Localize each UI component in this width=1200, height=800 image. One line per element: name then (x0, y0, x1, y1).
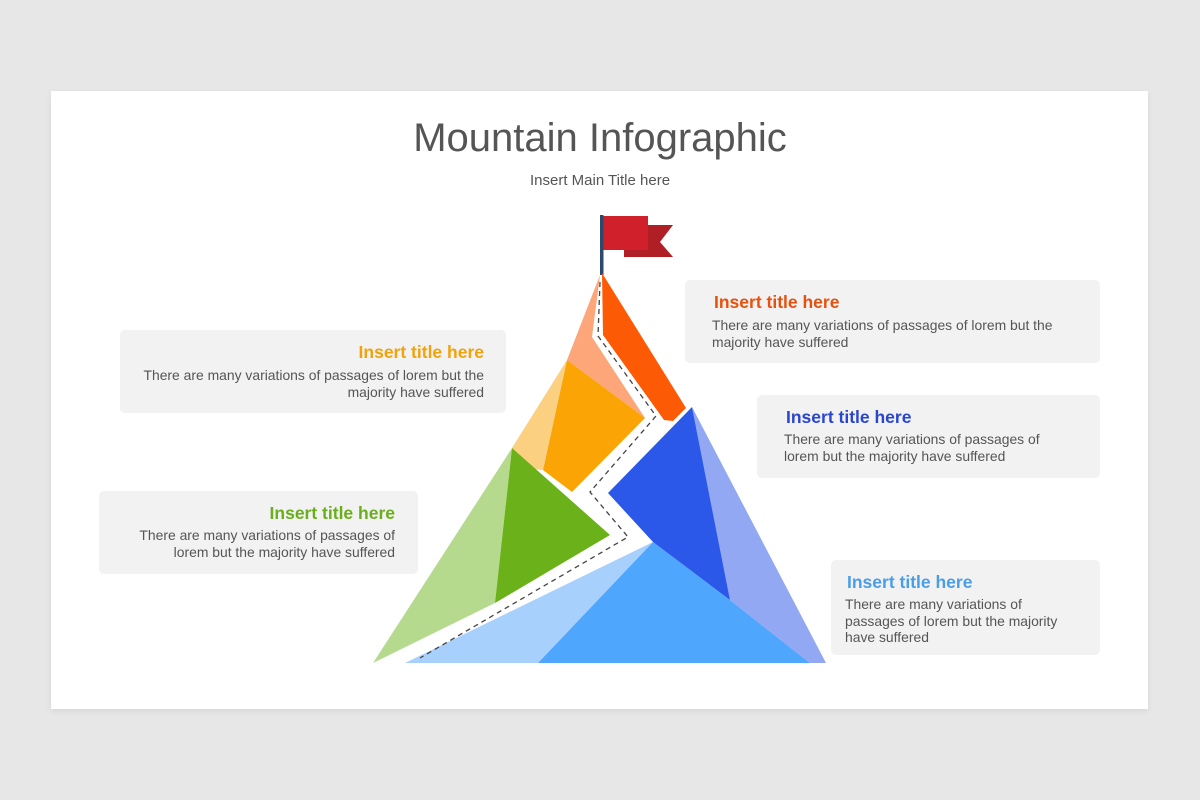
callout: orange: Insert title here (714, 292, 839, 312)
icon: flag (600, 215, 673, 275)
callout: green: There are many variations of passages of lorem but the majority have suffered (139, 527, 395, 560)
title: Mountain Infographic (413, 116, 787, 160)
dashed path (420, 282, 656, 658)
callout: light blue (831, 560, 1100, 655)
callout: light blue: There are many variations of passages of lorem but the majority have suffered (845, 596, 1057, 645)
callout: orange (685, 280, 1100, 363)
callout: green: Insert title here (270, 503, 395, 523)
callout: orange: There are many variations of passages of lorem but the majority have suffered (712, 317, 1052, 350)
callout: green (99, 491, 418, 574)
card panel (51, 91, 1148, 709)
callout: yellow: Insert title here (359, 342, 484, 362)
callout: yellow: There are many variations of passages of lorem but the majority have suffered (144, 367, 484, 400)
mountain peaks (373, 273, 826, 663)
callout: yellow (120, 330, 506, 413)
callout: blue (757, 395, 1100, 478)
callout: blue: Insert title here (786, 407, 911, 427)
callout: light blue: Insert title here (847, 572, 972, 592)
subtitle: Insert Main Title here (530, 172, 670, 189)
callout: blue: There are many variations of passages of lorem but the majority have suffered (784, 431, 1040, 464)
